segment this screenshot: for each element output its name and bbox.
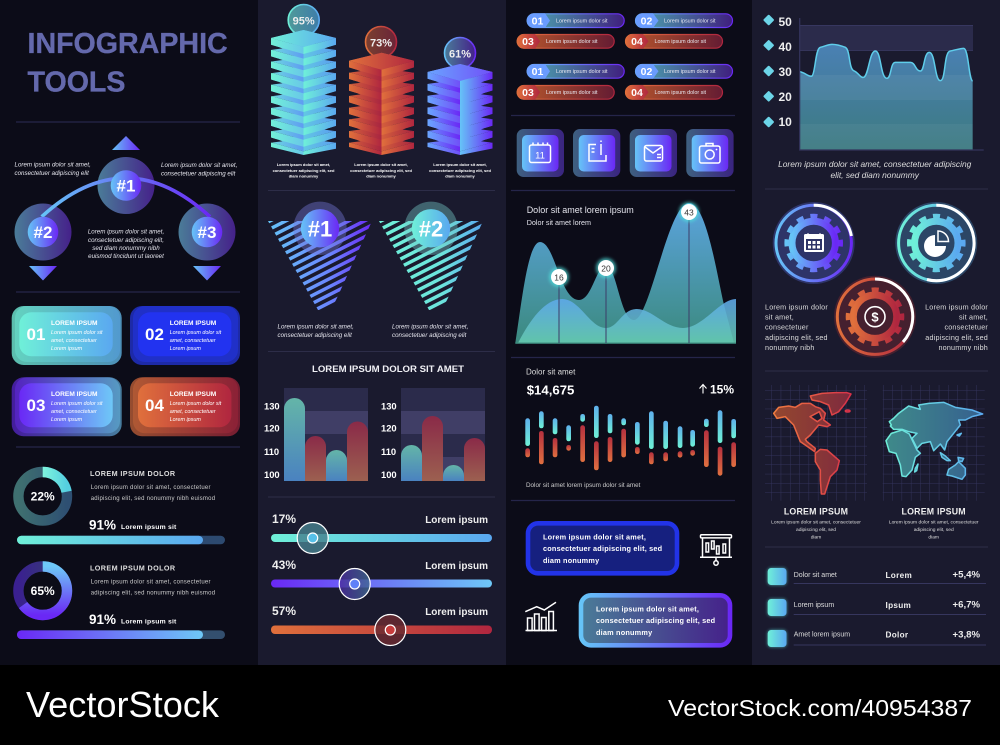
progress bar 2: 91% bbox=[89, 612, 116, 627]
card 04: Lorem ipsum dolor sit bbox=[170, 401, 222, 407]
stack captions: Lorem ipsum dolor sit amet, bbox=[277, 162, 330, 167]
text: lorem block 1: LOREM IPSUM DOLOR bbox=[90, 469, 176, 478]
node 2: #2 bbox=[34, 223, 52, 242]
pill 01 lower: 01 bbox=[532, 66, 543, 78]
bar chart right bbox=[381, 388, 485, 481]
table row 1 bbox=[768, 568, 986, 585]
progress bar 1: Lorem ipsum sit bbox=[121, 524, 177, 531]
bar chart right: 110 bbox=[381, 446, 396, 457]
card 01: 01 bbox=[26, 325, 45, 344]
stack captions: diam nonummy bbox=[366, 174, 397, 179]
pill 04 lower bbox=[625, 85, 722, 100]
text: left gear note: nonummy nibh bbox=[765, 343, 815, 352]
footer bbox=[0, 665, 1000, 745]
icon: calendar glyph bbox=[804, 233, 824, 252]
node 3: #3 bbox=[198, 223, 216, 242]
text: centre note bbox=[88, 228, 164, 260]
stack chart 61%: 61% bbox=[449, 48, 471, 60]
pill 03 lower: Lorem ipsum dolor sit bbox=[546, 90, 598, 96]
stack captions: consectetuer adipiscing elit, sed bbox=[273, 168, 335, 173]
callout blue: diam nonummy bbox=[543, 556, 600, 565]
stat header: 15% bbox=[710, 382, 734, 396]
text: left gear note: Lorem ipsum dolor bbox=[765, 302, 828, 312]
table row 1: Dolor sit amet bbox=[794, 572, 837, 579]
stack captions bbox=[273, 162, 491, 179]
arc diagram with three nodes bbox=[14, 136, 236, 280]
bar chart right: 120 bbox=[381, 422, 397, 434]
bar chart left: 100 bbox=[264, 469, 280, 480]
callout blue: consectetuer adipiscing elit, sed bbox=[543, 544, 662, 553]
text: lorem block 1: adipiscing elit, sed nonummy nibh euismod bbox=[91, 496, 215, 502]
card 02: LOREM IPSUM bbox=[170, 320, 217, 327]
icon: presentation board bbox=[700, 535, 732, 565]
pill 02 top bbox=[635, 13, 732, 28]
card 03: 03 bbox=[26, 396, 45, 415]
text: top left note: consectetuer adipiscing elit bbox=[14, 170, 89, 177]
line area chart: 30 bbox=[778, 65, 792, 79]
map captions: adipiscing elit, sed bbox=[796, 527, 836, 533]
bar chart caption: Dolor sit amet lorem ipsum dolor sit amet bbox=[526, 482, 641, 489]
text: left gear note bbox=[765, 302, 828, 352]
progress bar 2: Lorem ipsum sit bbox=[121, 619, 177, 626]
icon: arrow up bbox=[112, 136, 140, 150]
pill 02 lower: Lorem ipsum dolor sit bbox=[664, 69, 716, 75]
funnel #1: #1 bbox=[308, 216, 332, 242]
stack captions: consectetuer adipiscing elit, sed bbox=[350, 168, 412, 173]
icon: arrow down right bbox=[193, 266, 221, 280]
text: top right note bbox=[161, 162, 237, 178]
chart caption bbox=[778, 159, 972, 180]
gear: dollar bbox=[834, 276, 916, 358]
text: top left note bbox=[14, 162, 91, 177]
callout blue bbox=[528, 523, 677, 573]
pill 01 top: 01 bbox=[532, 15, 543, 27]
stack captions: diam nonummy bbox=[445, 174, 476, 179]
chart caption: Lorem ipsum dolor sit amet, consectetuer adipiscing bbox=[778, 159, 972, 169]
card 04: amet, consectetuer bbox=[170, 409, 216, 415]
card 04: 04 bbox=[145, 396, 164, 415]
card 02: amet, consectetuer bbox=[170, 338, 216, 344]
text: lorem block 2: Lorem ipsum dolor sit amet, consectetuer bbox=[91, 580, 211, 586]
stat header: Dolor sit amet bbox=[526, 368, 576, 376]
diamond legend markers bbox=[763, 14, 774, 128]
table row 2: Ipsum bbox=[886, 601, 911, 610]
table row 3: Dolor bbox=[886, 630, 909, 640]
area chart bbox=[515, 202, 736, 344]
logo text: VectorStock bbox=[26, 684, 220, 725]
table row 2: Lorem ipsum bbox=[794, 602, 834, 609]
map captions: diam bbox=[928, 535, 939, 541]
pill 02 lower bbox=[635, 64, 732, 79]
text: centre note: consectetuer adipiscing elit, bbox=[88, 237, 164, 244]
pill 01 lower bbox=[527, 64, 624, 79]
table row 3: +3,8% bbox=[953, 630, 980, 640]
pill 01 lower: Lorem ipsum dolor sit bbox=[556, 69, 608, 75]
slider 17%: Lorem ipsum bbox=[425, 515, 488, 526]
card 01 bbox=[12, 306, 122, 365]
pill 02 lower: 02 bbox=[641, 66, 652, 78]
node 3 bbox=[192, 217, 222, 247]
card 01: amet, consectetuer bbox=[51, 338, 97, 344]
funnel #2: #2 bbox=[419, 216, 443, 242]
data point 16: 16 bbox=[554, 272, 564, 282]
funnel captions: Lorem ipsum dolor sit amet, bbox=[278, 324, 354, 330]
bar chart left bbox=[264, 388, 368, 481]
image id: VectorStock.com/40954387 bbox=[668, 695, 972, 721]
pill 03 lower: 03 bbox=[522, 87, 534, 99]
donut chart 65% bbox=[18, 566, 67, 615]
donut chart 22% bbox=[18, 472, 67, 521]
map captions bbox=[771, 506, 979, 541]
slider 57%: 57% bbox=[272, 604, 296, 618]
stack chart 73%: 73% bbox=[370, 38, 392, 50]
card 01: Lorem ipsum dolor sit bbox=[51, 330, 103, 336]
text: lorem block 1 bbox=[90, 469, 215, 502]
icon: bar chart trend bbox=[525, 602, 557, 630]
text: left gear note: sit amet, bbox=[765, 312, 794, 322]
pill 04 lower: 04 bbox=[631, 87, 643, 99]
panel: column 4 bbox=[752, 0, 1000, 665]
pill 03 top bbox=[517, 34, 614, 49]
pill 01 top bbox=[527, 13, 624, 28]
map: Americas bbox=[765, 385, 867, 501]
text: lorem block 2: LOREM IPSUM DOLOR bbox=[90, 564, 176, 573]
title: TOOLS bbox=[28, 66, 125, 98]
progress bar 1 bbox=[17, 518, 225, 544]
table row 1: +5,4% bbox=[953, 570, 980, 580]
bar chart left: 110 bbox=[264, 446, 279, 457]
icon: calendar: 11 bbox=[535, 150, 545, 162]
funnel captions: Lorem ipsum dolor sit amet, bbox=[392, 324, 468, 330]
slider 43% bbox=[271, 558, 492, 600]
pill 04 lower: Lorem ipsum dolor sit bbox=[654, 90, 707, 96]
text: top right note: consectetuer adipiscing elit bbox=[161, 170, 236, 178]
icon: camera bbox=[686, 129, 734, 177]
pill 04 top bbox=[625, 34, 722, 49]
bar chart right: 100 bbox=[381, 469, 397, 480]
data point 16 bbox=[549, 267, 569, 287]
text: top right note: Lorem ipsum dolor sit amet, bbox=[161, 162, 237, 169]
progress bar 1: 91% bbox=[89, 518, 116, 532]
card 03: Lorem ipsum bbox=[51, 417, 83, 423]
funnel #2 bbox=[379, 202, 482, 310]
pill 03 top: 03 bbox=[522, 36, 534, 48]
donut chart 22%: 22% bbox=[31, 490, 55, 504]
donut chart 65%: 65% bbox=[31, 584, 55, 598]
stack captions: Lorem ipsum dolor sit amet, bbox=[433, 162, 487, 167]
line area chart: 20 bbox=[778, 90, 792, 104]
funnel captions: consectetuer adipiscing elit bbox=[278, 332, 352, 339]
slider 43%: Lorem ipsum bbox=[425, 561, 488, 572]
map captions: LOREM IPSUM bbox=[902, 506, 966, 516]
stack chart 61% bbox=[427, 38, 493, 158]
card 03: Lorem ipsum dolor sit bbox=[51, 401, 103, 407]
funnel #1 bbox=[268, 202, 371, 310]
text: left gear note: consectetuer bbox=[765, 323, 809, 332]
icon: mail bbox=[630, 129, 677, 177]
text: lorem block 1: Lorem ipsum dolor sit amet, consectetuer bbox=[91, 485, 211, 491]
text: right gear note: Lorem ipsum dolor bbox=[925, 302, 988, 312]
callout gradient bbox=[581, 595, 730, 645]
stack chart 95%: 95% bbox=[293, 16, 315, 28]
card 04: Lorem ipsum bbox=[170, 417, 201, 423]
line area chart bbox=[763, 14, 984, 150]
area chart: Dolor sit amet lorem bbox=[527, 218, 591, 227]
slider 43%: 43% bbox=[272, 558, 296, 572]
slider 17%: 17% bbox=[272, 512, 296, 526]
map captions: diam bbox=[811, 535, 821, 541]
panel: column 1 bbox=[0, 0, 258, 665]
heading: bar charts: LOREM IPSUM DOLOR SIT AMET bbox=[312, 364, 464, 375]
stack captions: diam nonummy bbox=[289, 174, 319, 179]
table row 2: +6,7% bbox=[953, 600, 980, 610]
map captions: Lorem ipsum dolor sit amet, consectetuer bbox=[889, 520, 979, 526]
title: INFOGRAPHIC bbox=[28, 28, 228, 60]
bar chart left: 130 bbox=[264, 400, 280, 412]
text: left gear note: adipiscing elit, sed bbox=[765, 333, 828, 342]
slider 57%: Lorem ipsum bbox=[425, 607, 488, 618]
table row 1: Lorem bbox=[886, 571, 912, 580]
card 03: LOREM IPSUM bbox=[51, 391, 98, 398]
pill 01 top: Lorem ipsum dolor sit bbox=[556, 18, 608, 24]
pill 03 top: Lorem ipsum dolor sit bbox=[546, 39, 598, 45]
funnel captions: consectetuer adipiscing elit bbox=[392, 332, 467, 339]
funnel captions bbox=[278, 324, 468, 339]
card 04: LOREM IPSUM bbox=[170, 391, 217, 398]
callout gradient: Lorem ipsum dolor sit amet, bbox=[596, 604, 699, 614]
text: right gear note: consectetuer bbox=[944, 323, 988, 332]
chart caption: elit, sed diam nonummy bbox=[830, 170, 920, 180]
gear: calendar bbox=[773, 202, 855, 284]
panel: column 3 bbox=[506, 0, 752, 665]
slider 17% bbox=[271, 512, 492, 554]
stack captions: Lorem ipsum dolor sit amet, bbox=[354, 162, 408, 167]
text: right gear note: adipiscing elit, sed bbox=[925, 333, 988, 342]
text: right gear note: nonummy nibh bbox=[938, 343, 988, 352]
area chart: Dolor sit amet lorem ipsum bbox=[527, 205, 634, 215]
pill 02 top: 02 bbox=[641, 15, 652, 27]
card 03: amet, consectetuer bbox=[51, 409, 97, 415]
line area chart: 40 bbox=[778, 40, 792, 54]
line area chart: 50 bbox=[778, 15, 792, 29]
card 02: Lorem ipsum bbox=[170, 346, 201, 352]
text: right gear note: sit amet, bbox=[959, 312, 988, 322]
stack captions: consectetuer adipiscing elit, sed bbox=[429, 168, 491, 173]
line area chart: 10 bbox=[778, 115, 792, 129]
data point 20 bbox=[596, 258, 616, 278]
title bbox=[28, 28, 228, 98]
card 02: 02 bbox=[145, 325, 164, 344]
stack chart 95% bbox=[270, 4, 336, 158]
card 01: LOREM IPSUM bbox=[51, 320, 98, 327]
icon: arrow up bbox=[700, 384, 706, 394]
table row 3: Amet lorem ipsum bbox=[794, 632, 850, 639]
pill 04 top: 04 bbox=[631, 36, 643, 48]
callout gradient: consectetuer adipiscing elit, sed bbox=[596, 616, 715, 625]
stack chart 73% bbox=[348, 26, 414, 158]
pill 04 top: Lorem ipsum dolor sit bbox=[654, 39, 707, 45]
text: centre note: sed diam nonummy nibh bbox=[92, 245, 160, 252]
text: lorem block 2 bbox=[90, 564, 215, 597]
gear: pie chart bbox=[895, 202, 977, 284]
map: Eurasia Africa Australia bbox=[883, 385, 985, 501]
icon: arrow down left bbox=[29, 266, 57, 280]
card 04 bbox=[130, 377, 240, 436]
table row 3 bbox=[768, 630, 986, 647]
text: centre note: euismod tincidunt ut laoreet bbox=[88, 253, 164, 260]
data point 43 bbox=[679, 202, 699, 222]
card 01: Lorem ipsum bbox=[51, 346, 83, 352]
icon: document bbox=[573, 129, 620, 177]
data point 20: 20 bbox=[601, 264, 611, 274]
pill 03 lower bbox=[517, 85, 614, 100]
text: lorem block 2: adipiscing elit, sed nonummy nibh euismod bbox=[91, 591, 215, 597]
card 03 bbox=[12, 377, 122, 436]
progress bar 2 bbox=[17, 612, 225, 639]
pill 02 top: Lorem ipsum dolor sit bbox=[664, 18, 716, 24]
node 1 bbox=[111, 170, 141, 201]
map captions: adipiscing elit, sed bbox=[914, 527, 954, 533]
text: top left note: Lorem ipsum dolor sit amet, bbox=[14, 162, 91, 168]
card 02 bbox=[130, 306, 240, 365]
icon: dollar glyph: $ bbox=[871, 310, 879, 324]
bar chart left: 120 bbox=[264, 422, 280, 434]
paired bar chart bbox=[525, 406, 736, 476]
slider 57% bbox=[271, 604, 492, 646]
node 1: #1 bbox=[117, 176, 135, 196]
table row 2 bbox=[768, 599, 986, 616]
icon: calendar bbox=[517, 129, 564, 177]
text: right gear note bbox=[925, 302, 988, 352]
panel: column 2 bbox=[258, 0, 506, 665]
callout blue: Lorem ipsum dolor sit amet, bbox=[543, 532, 646, 542]
bar chart right: 130 bbox=[381, 400, 397, 412]
map captions: Lorem ipsum dolor sit amet, consectetuer bbox=[771, 520, 861, 526]
callout gradient: diam nonummy bbox=[596, 628, 653, 637]
node 2 bbox=[28, 217, 58, 247]
stat header bbox=[526, 368, 734, 398]
text: centre note: Lorem ipsum dolor sit amet, bbox=[88, 228, 164, 236]
stat header: $14,675 bbox=[527, 382, 574, 398]
card 02: Lorem ipsum dolor sit bbox=[170, 330, 222, 336]
icon: pie glyph bbox=[924, 231, 948, 257]
map captions: LOREM IPSUM bbox=[784, 506, 848, 516]
data point 43: 43 bbox=[684, 208, 694, 218]
